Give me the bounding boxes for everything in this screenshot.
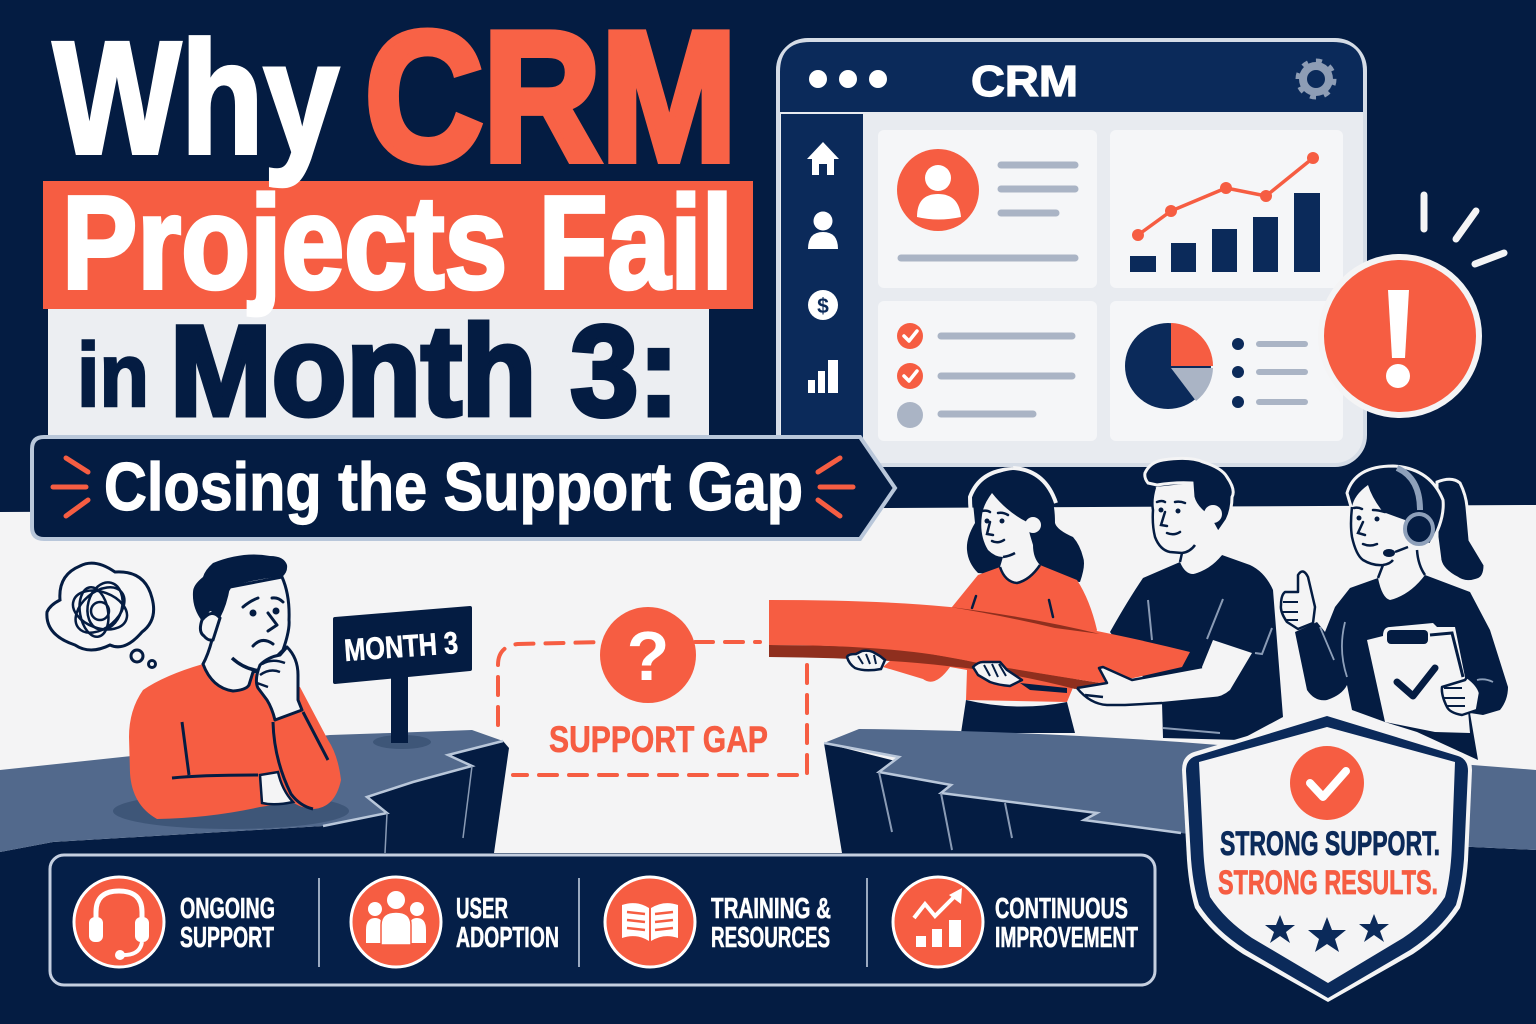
benefit: continuous improvement <box>893 877 1138 967</box>
hand on chin <box>256 647 302 720</box>
title: Why <box>53 8 339 187</box>
benefit: training and resources: RESOURCES <box>711 922 830 954</box>
benefit: training and resources <box>605 877 831 967</box>
thumbs up <box>1281 571 1315 629</box>
benefit: ongoing support <box>74 877 275 967</box>
right cliff <box>824 729 1536 853</box>
card: task checklist <box>878 301 1097 441</box>
plank bridging the gap <box>769 600 1190 689</box>
shield badge: STRONG RESULTS. <box>1218 864 1438 902</box>
man holding plank <box>1110 458 1283 740</box>
title: in <box>77 326 149 426</box>
benefit: training and resources: TRAINING & <box>711 893 831 925</box>
support gap: SUPPORT GAP <box>549 719 768 760</box>
window header: CRM <box>971 57 1078 106</box>
alert icon <box>1321 195 1504 415</box>
woman right hand <box>973 662 1022 686</box>
card: growth chart <box>1110 130 1343 288</box>
benefit: ongoing support: ONGOING <box>180 893 275 925</box>
window sidebar <box>781 114 863 463</box>
left cliff <box>0 730 509 853</box>
woman face <box>981 493 1040 583</box>
card: pie chart <box>1110 301 1343 441</box>
shield badge <box>1182 712 1472 1002</box>
support woman <box>1281 466 1508 760</box>
window header <box>780 42 1363 112</box>
benefit: continuous improvement: IMPROVEMENT <box>995 922 1138 954</box>
subtitle banner: Closing the Support Gap <box>104 449 803 525</box>
confused man <box>113 555 349 829</box>
stars <box>1265 914 1389 952</box>
shield badge: STRONG SUPPORT. <box>1220 825 1440 863</box>
month 3 sign: MONTH 3 <box>343 625 459 668</box>
hand on clipboard <box>1442 677 1480 715</box>
support gap <box>498 607 807 775</box>
support gap: ? <box>627 617 669 695</box>
bottom benefits panel <box>50 855 1155 985</box>
clipboard <box>1367 623 1470 733</box>
title: Month 3: <box>170 300 679 443</box>
CRM dashboard window <box>778 40 1365 465</box>
man hand and arm <box>1077 640 1252 705</box>
woman holding plank <box>883 468 1097 733</box>
benefit: user adoption: USER <box>456 893 508 925</box>
face <box>203 577 289 691</box>
title: Projects Fail <box>62 169 733 316</box>
headset <box>1383 468 1433 557</box>
benefit: user adoption <box>351 877 559 967</box>
title <box>43 0 753 443</box>
benefit: continuous improvement: CONTINUOUS <box>995 893 1128 925</box>
card: contact profile <box>878 130 1097 288</box>
benefit: ongoing support: SUPPORT <box>180 922 274 954</box>
benefit: user adoption: ADOPTION <box>456 922 559 954</box>
window sidebar: $ <box>817 295 829 318</box>
thought bubble <box>47 563 156 668</box>
woman left hand <box>847 651 885 670</box>
month 3 sign <box>333 606 472 749</box>
subtitle banner <box>32 437 895 539</box>
